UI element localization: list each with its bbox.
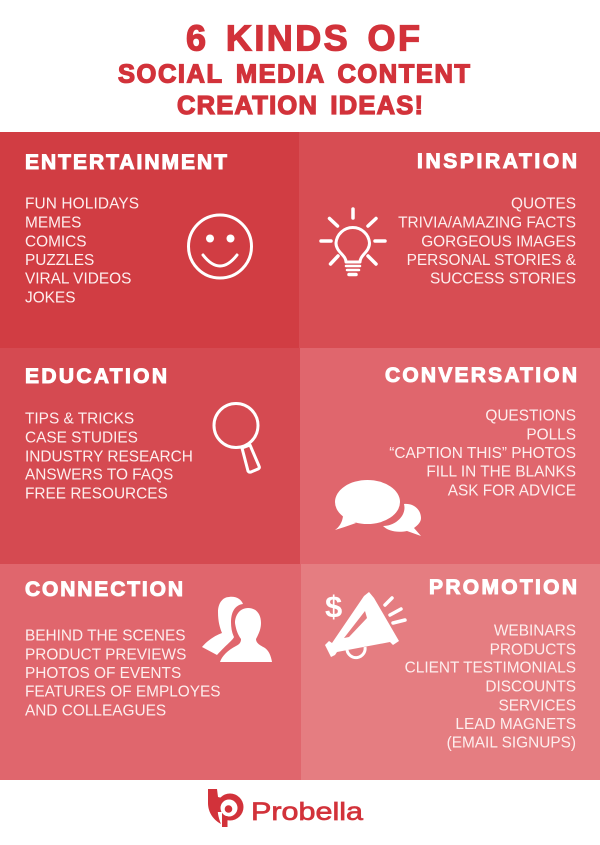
list: conversation: [389, 408, 576, 500]
list: connection: PHOTOS OF EVENTS: [25, 665, 181, 682]
list: education: INDUSTRY RESEARCH: [25, 448, 193, 466]
heading: conversation: CONVERSATION: [385, 364, 577, 387]
heading: promotion: PROMOTION: [429, 576, 577, 599]
list: promotion: [405, 622, 576, 752]
title: 6 KINDS OF: [186, 18, 420, 58]
heading: inspiration: INSPIRATION: [417, 150, 577, 173]
list: promotion: PRODUCTS: [490, 642, 576, 658]
list: entertainment: VIRAL VIDEOS: [25, 270, 131, 288]
list: education: [25, 410, 193, 502]
logo: Probella: Probella: [251, 798, 363, 826]
list: entertainment: FUN HOLIDAYS: [25, 196, 139, 212]
list: connection: PRODUCT PREVIEWS: [25, 646, 186, 664]
title: CREATION IDEAS!: [177, 92, 423, 120]
icon: magnifying glass: [214, 404, 259, 472]
icon: light bulb: [321, 209, 385, 274]
panel: inspiration: [299, 132, 600, 348]
logo: Probella: [208, 789, 363, 827]
title: [118, 18, 470, 120]
list: entertainment: [25, 196, 139, 306]
list: education: CASE STUDIES: [25, 430, 138, 446]
panel: connection: [0, 564, 301, 780]
heading: education: EDUCATION: [25, 365, 167, 388]
list: inspiration: SUCCESS STORIES: [430, 270, 576, 288]
list: entertainment: PUZZLES: [25, 252, 94, 269]
panel: education: [0, 348, 300, 564]
list: promotion: LEAD MAGNETS: [455, 716, 576, 733]
title: SOCIAL MEDIA CONTENT: [118, 60, 470, 88]
heading: entertainment: ENTERTAINMENT: [25, 151, 227, 174]
list: conversation: QUESTIONS: [485, 408, 576, 424]
list: promotion: SERVICES: [498, 698, 576, 714]
list: promotion: CLIENT TESTIMONIALS: [405, 660, 576, 676]
list: education: ANSWERS TO FAQS: [25, 466, 173, 484]
list: entertainment: COMICS: [25, 234, 87, 250]
icon: megaphone with dollar sign: $: [325, 589, 342, 624]
panel: conversation: [300, 348, 600, 564]
list: promotion: WEBINARS: [494, 622, 576, 640]
list: inspiration: QUOTES: [511, 196, 576, 212]
list: promotion: (EMAIL SIGNUPS): [447, 734, 576, 752]
list: conversation: “CAPTION THIS” PHOTOS: [389, 445, 576, 462]
list: conversation: FILL IN THE BLANKS: [426, 464, 576, 480]
list: conversation: ASK FOR ADVICE: [448, 482, 576, 500]
list: connection: BEHIND THE SCENES: [25, 628, 186, 644]
icon: smiley face: [188, 215, 252, 278]
icon: speech bubbles: [335, 480, 421, 536]
panel: entertainment: [0, 132, 300, 348]
list: connection: AND COLLEAGUES: [25, 702, 166, 720]
list: education: TIPS & TRICKS: [25, 410, 134, 428]
list: connection: FEATURES OF EMPLOYES: [25, 684, 221, 700]
list: connection: [25, 628, 221, 720]
list: education: FREE RESOURCES: [25, 486, 168, 502]
list: inspiration: [398, 196, 577, 288]
list: inspiration: TRIVIA/AMAZING FACTS: [398, 214, 576, 232]
list: conversation: POLLS: [526, 426, 576, 444]
heading: connection: CONNECTION: [25, 578, 183, 601]
icon: megaphone with dollar sign: [325, 589, 405, 658]
list: entertainment: JOKES: [25, 290, 75, 306]
list: inspiration: PERSONAL STORIES &: [407, 252, 577, 269]
list: promotion: DISCOUNTS: [485, 678, 576, 696]
list: inspiration: GORGEOUS IMAGES: [421, 234, 576, 250]
panel: promotion: [301, 564, 600, 780]
list: entertainment: MEMES: [25, 214, 81, 232]
icon: two people: [202, 597, 272, 662]
